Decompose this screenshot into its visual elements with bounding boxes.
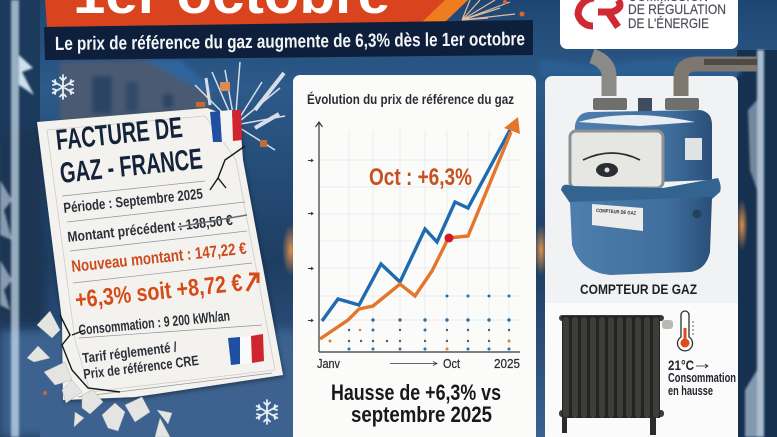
panel: gas meter and radiator [545, 56, 757, 437]
callout: Oct : +6,3% [369, 164, 472, 191]
rim [561, 178, 721, 203]
icon: gas meter [561, 56, 757, 275]
axes [316, 122, 520, 352]
axis labels [317, 357, 520, 371]
arrow head [504, 117, 520, 134]
logo text [628, 0, 726, 31]
bill rows: Montant précédent : 138,50 € [67, 213, 234, 246]
bill heading: FACTURE DE [54, 112, 184, 157]
panel: gas bill [37, 108, 283, 400]
ticks [308, 159, 313, 322]
axis arrow [390, 362, 437, 366]
marker: October [444, 234, 454, 242]
bill heading: GAZ - FRANCE [58, 143, 204, 190]
bill paper [37, 108, 283, 400]
line chart [308, 117, 520, 371]
chart caption [331, 380, 501, 427]
meter caption: COMPTEUR DE GAZ [580, 281, 697, 297]
radiator note: Consommation [668, 370, 736, 385]
meter label: COMPTEUR DE GAZ [596, 208, 636, 217]
bill rows: Période : Septembre 2025 [63, 186, 204, 217]
meter label [592, 204, 643, 231]
icon: torn flag [210, 110, 242, 142]
burst behind bill [195, 62, 285, 150]
chart caption: Hausse de +6,3% vs [331, 380, 501, 405]
panel: price chart [293, 75, 536, 437]
building [60, 60, 215, 125]
bill rows: Prix de référence CRE [82, 352, 200, 382]
bill rows: Tarif réglementé / [81, 339, 178, 366]
headline banner [45, 0, 445, 27]
chart caption: septembre 2025 [351, 402, 492, 427]
icon: thermometer [677, 311, 694, 351]
icon: up arrow [247, 274, 258, 291]
bill rows [62, 181, 272, 397]
logo panel [560, 0, 738, 49]
icon: radiator [559, 315, 673, 435]
orange line [320, 132, 511, 339]
radiator note [668, 357, 736, 398]
icon: snowflake bottom [257, 400, 277, 424]
debris top [196, 82, 267, 147]
lower body [570, 197, 712, 275]
nuts [593, 98, 627, 110]
pipes [592, 56, 609, 96]
axis labels: Oct [443, 357, 460, 371]
logo text: DE RÉGULATION [628, 1, 726, 17]
axis labels: Janv [317, 357, 341, 371]
icon: snowflake top left [53, 75, 73, 99]
upper body [572, 110, 712, 185]
chart title: Évolution du prix de référence du gaz [307, 92, 514, 107]
axis labels: 2025 [494, 357, 520, 371]
subtitle text: Le prix de référence du gaz augmente de 6,3% dès le 1er octobre [55, 29, 525, 55]
dial [570, 131, 663, 188]
radiator note: en hausse [668, 383, 713, 398]
icon: French flag on bill [228, 334, 264, 365]
debris: paper fragments [27, 311, 172, 437]
bill rows: +6,3% soit +8,72 € [74, 270, 244, 314]
bill rows: Nouveau montant : 147,22 € [71, 240, 247, 276]
cracks [60, 146, 245, 392]
icon: CRE logo [578, 0, 620, 27]
blue line [322, 130, 510, 321]
logo text: DE L'ÉNERGIE [628, 15, 709, 31]
dot grid [348, 294, 511, 350]
bill rows: Consommation : 9 200 kWh/an [78, 308, 231, 339]
subtitle bar [44, 20, 533, 60]
orange streak and sparks [422, 0, 524, 22]
bill heading [54, 112, 204, 190]
radiator note: 21°C [668, 357, 694, 373]
